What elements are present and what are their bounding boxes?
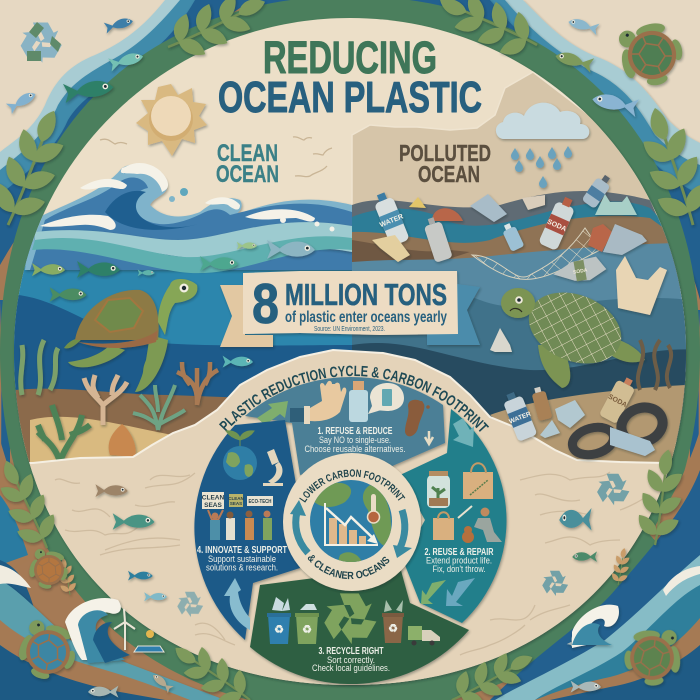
panel: step 3 recycle right bbox=[250, 567, 469, 684]
icon: turtle caught in net bbox=[490, 279, 645, 388]
icon: shore water bottle bbox=[499, 389, 539, 442]
icon: protest signs and people: ECO-TECH bbox=[248, 499, 272, 505]
panel: polluted ocean sky bbox=[352, 72, 700, 480]
icon: plant jar bbox=[427, 471, 450, 508]
icon: arrow into step 1 bbox=[257, 401, 288, 425]
icon: crushed bottle with label bbox=[552, 255, 608, 286]
icon: rain cloud bbox=[496, 103, 589, 188]
cycle wheel bbox=[194, 377, 509, 686]
icon: hub arrow heads bbox=[290, 500, 412, 558]
icon: thermometer bbox=[368, 494, 380, 523]
bottom-left border scene bbox=[0, 440, 225, 700]
icon: outgoing arrows bbox=[421, 578, 475, 606]
hub text bbox=[299, 469, 406, 580]
clean ocean fish bbox=[32, 240, 315, 368]
icon: green bin bbox=[295, 604, 319, 644]
banner: 8 million tons: of plastic enter oceans yearly bbox=[285, 309, 447, 326]
decorative birds bbox=[100, 137, 332, 177]
step 1 text: 1. REFUSE & REDUCE bbox=[318, 425, 392, 437]
icon: blue bin: ♻ bbox=[274, 624, 284, 636]
label: polluted ocean: OCEAN bbox=[418, 161, 480, 187]
icon: plastic tray bbox=[603, 224, 647, 255]
panel: step 1 refuse and reduce bbox=[245, 377, 445, 475]
icon: mint bag bbox=[595, 194, 637, 215]
banner: 8 million tons: MILLION TONS bbox=[285, 277, 447, 312]
corner waves and energy icons bbox=[65, 598, 619, 663]
icon: yellow wrapper bbox=[409, 197, 426, 208]
coral and seaweed group bbox=[21, 340, 218, 462]
icon: green sea turtle bbox=[64, 279, 197, 392]
icon: pale bag bbox=[522, 195, 545, 210]
icon: brown bin bbox=[382, 600, 404, 643]
icon: footprint bbox=[405, 400, 433, 444]
icon: protest signs and people: CLEAN bbox=[228, 496, 244, 501]
icon: water bottle bbox=[369, 189, 412, 248]
icon: speech bubble with bottle bbox=[368, 383, 404, 414]
icon: wind turbine bbox=[114, 609, 135, 650]
icon: crushed beige carton bbox=[372, 235, 410, 262]
plastic reduction cycle title: PLASTIC REDUCTION CYCLE & CARBON FOOTPRINT bbox=[219, 366, 489, 432]
label: polluted ocean bbox=[399, 140, 491, 187]
title: REDUCING bbox=[263, 32, 437, 83]
banner: 8 million tons: 8 bbox=[252, 272, 279, 336]
ribbon right bbox=[427, 284, 480, 345]
icon: microscope bbox=[263, 449, 283, 486]
icon: recycling truck bbox=[408, 626, 440, 646]
dark seaweed bbox=[638, 340, 671, 390]
icon: small bottle bbox=[500, 221, 524, 252]
label: clean ocean: CLEAN bbox=[217, 140, 278, 167]
fishing net bbox=[472, 228, 600, 279]
icon: orange jug bbox=[588, 224, 612, 252]
icon: corner recycle symbol bbox=[15, 22, 62, 67]
icon: soda bottle bbox=[538, 194, 578, 251]
icon: clear bottle bbox=[422, 215, 453, 263]
icon: globe with sprout bbox=[223, 431, 257, 480]
hub text: LOWER CARBON FOOTPRINT bbox=[299, 469, 406, 503]
icon: shore soda bottle: SODA bbox=[607, 393, 628, 409]
icon: brown bottle bbox=[530, 386, 552, 421]
icon: tote bag bbox=[463, 463, 493, 499]
icon: protest signs and people: CLEAN bbox=[202, 494, 224, 502]
icon: arrow into step 2 bbox=[453, 418, 474, 447]
sand fish bbox=[95, 484, 597, 601]
panel: step 2 reuse and repair bbox=[400, 409, 507, 623]
icon: shore soda bottle bbox=[599, 374, 638, 424]
icon: soda bottle: SODA bbox=[546, 219, 567, 233]
icon: sun bbox=[136, 84, 207, 156]
step 1 text bbox=[304, 425, 406, 454]
icon: plastic cup bbox=[470, 194, 507, 222]
step 4 text: 4. INNOVATE & SUPPORT bbox=[197, 544, 287, 556]
icon: big recycle symbol bbox=[318, 593, 376, 649]
banner: 8 million tons bbox=[220, 271, 480, 347]
icon: earth globe bbox=[310, 480, 392, 570]
chart: falling carbon footprint bbox=[325, 503, 378, 545]
icon: bottom-left wave bbox=[65, 598, 130, 663]
icon: shards bbox=[540, 400, 585, 438]
step 4 text bbox=[197, 544, 287, 572]
banner: 8 million tons: Source: UN Environment, 2023. bbox=[314, 326, 385, 333]
icon: protest signs and people: SEAS bbox=[230, 501, 242, 506]
beach rubbish bbox=[499, 374, 668, 459]
step 2 text bbox=[424, 546, 494, 574]
icon: red tub bbox=[432, 208, 463, 221]
panel: clean seabed layers bbox=[16, 388, 228, 470]
icon: bottom-right wave bbox=[572, 605, 619, 648]
icon: brown bin: ♻ bbox=[388, 623, 398, 635]
polluted ocean plastic debris bbox=[369, 172, 667, 315]
icon: hub arrows bbox=[296, 510, 405, 553]
icon: recycle marks on sand bbox=[174, 474, 629, 619]
step 3 text bbox=[312, 645, 390, 673]
title bbox=[218, 32, 482, 122]
icon: shore water bottle: WATER bbox=[508, 410, 532, 426]
step 1 text: Say NO to single-use. bbox=[319, 435, 391, 445]
sand ripples bbox=[55, 472, 650, 655]
step 3 text: Check local guidelines. bbox=[312, 663, 390, 673]
label: clean ocean: OCEAN bbox=[216, 161, 279, 188]
banner card bbox=[243, 271, 458, 335]
icon: blue bottle bbox=[581, 172, 614, 209]
step 4 text: Support sustainable bbox=[208, 554, 276, 564]
hub text: & CLEANER OCEANS bbox=[308, 555, 390, 580]
step 2 text: Extend product life. bbox=[426, 556, 492, 566]
icon: outgoing arrow bbox=[224, 578, 250, 630]
icon: solar panel bbox=[134, 630, 164, 652]
panel: clean ocean water bbox=[0, 163, 352, 420]
panel: step 4 innovate and support bbox=[194, 420, 300, 640]
icon: plastic bag bbox=[616, 256, 667, 315]
step 3 text: Sort correctly. bbox=[327, 655, 375, 665]
step 2 text: Fix, don't throw. bbox=[432, 564, 486, 574]
icon: large plastic bottle bbox=[610, 427, 655, 456]
icon: green bin: ♻ bbox=[302, 624, 312, 636]
panel: polluted ocean water bbox=[352, 191, 700, 440]
icon: person fixing teddy bbox=[462, 508, 502, 543]
label: polluted ocean: POLLUTED bbox=[399, 140, 491, 166]
ribbon left bbox=[220, 285, 273, 347]
icon: protest signs and people: SEAS bbox=[204, 502, 223, 509]
panel: central hub bbox=[283, 453, 424, 594]
icon: crushed bottle with label: SODA bbox=[573, 267, 588, 276]
icon: protest signs and people bbox=[202, 492, 273, 540]
icon: bottle in step 1 bbox=[349, 381, 368, 422]
step 4 text: solutions & research. bbox=[206, 562, 278, 572]
step 3 text: 3. RECYCLE RIGHT bbox=[318, 645, 384, 657]
step 1 text: Choose reusable alternatives. bbox=[304, 444, 406, 454]
icon: blue bin bbox=[267, 597, 291, 644]
icon: double arrow bbox=[458, 506, 472, 518]
step 2 text: 2. REUSE & REPAIR bbox=[424, 546, 494, 558]
sand foreground bbox=[29, 349, 668, 685]
icon: refusing hand bbox=[290, 381, 346, 424]
panel: polluted shore bbox=[490, 385, 686, 470]
icon: tyres bbox=[569, 402, 668, 459]
icon: water bottle: WATER bbox=[379, 213, 404, 229]
bottom-right border scene bbox=[490, 430, 700, 700]
label: clean ocean bbox=[216, 140, 279, 188]
title: OCEAN PLASTIC bbox=[218, 73, 482, 122]
icon: repair bag bbox=[433, 512, 454, 540]
